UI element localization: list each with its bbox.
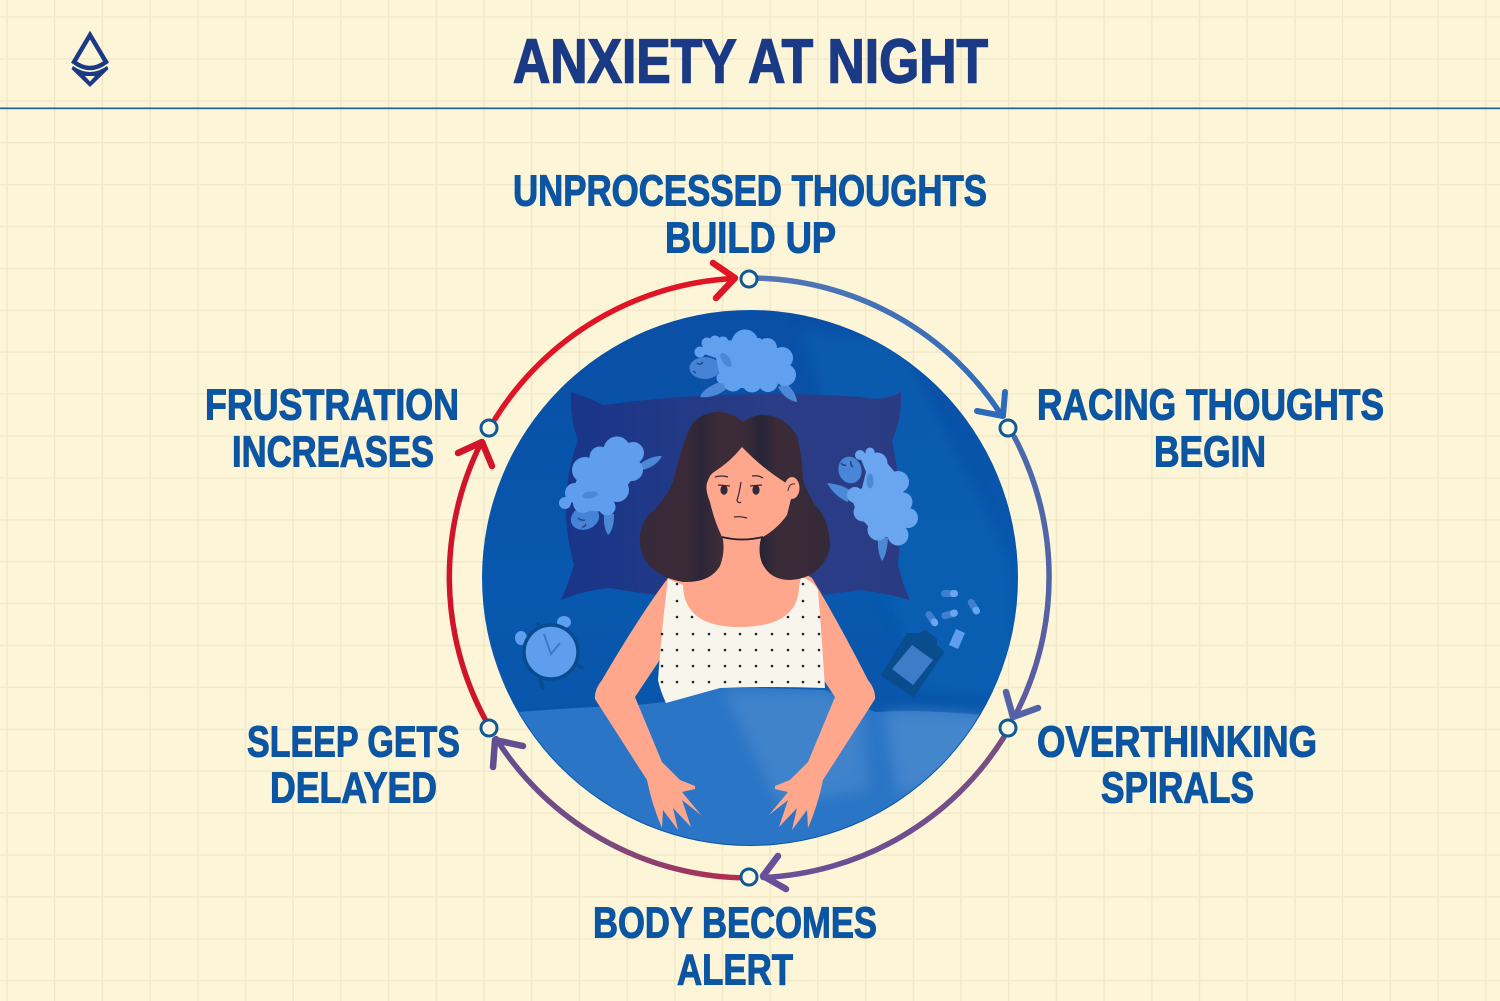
alarm clock xyxy=(515,616,582,688)
label: overthinking spirals: SPIRALS xyxy=(1101,764,1254,812)
sheep: left xyxy=(559,436,662,535)
arrow: sleep delayed to frustration xyxy=(449,442,492,719)
pillow xyxy=(561,392,910,600)
sheep: right xyxy=(827,448,918,561)
blanket xyxy=(519,688,980,845)
label: frustration increases: INCREASES xyxy=(232,428,434,476)
label: racing thoughts begin: BEGIN xyxy=(1154,428,1266,476)
necklace xyxy=(722,537,763,540)
label: unprocessed thoughts build up xyxy=(513,166,987,262)
label: sleep gets delayed: SLEEP GETS xyxy=(247,718,460,766)
polka dot tank top xyxy=(658,577,825,703)
label: unprocessed thoughts build up: UNPROCESSED THOUGHTS xyxy=(513,166,987,216)
face xyxy=(706,447,792,540)
soft light band xyxy=(812,339,953,477)
label: overthinking spirals: OVERTHINKING xyxy=(1037,718,1317,766)
ear xyxy=(784,477,800,499)
title: ANXIETY AT NIGHT xyxy=(513,28,988,96)
label: body becomes alert xyxy=(593,898,877,994)
arrow: body alert to sleep delayed xyxy=(493,738,739,878)
arrow: racing thoughts to overthinking xyxy=(1006,437,1049,717)
eyes, brows, nose and mouth xyxy=(715,476,763,518)
arrow: frustration to thoughts build up xyxy=(495,263,735,419)
pill bottle and pills xyxy=(883,590,981,695)
label: racing thoughts begin: RACING THOUGHTS xyxy=(1037,380,1384,430)
label: racing thoughts begin xyxy=(1037,380,1384,476)
blanket highlights xyxy=(724,692,868,805)
logo icon xyxy=(72,35,108,87)
label: sleep gets delayed: DELAYED xyxy=(270,764,437,812)
illustration: woman awake in bed xyxy=(470,310,1030,860)
hair xyxy=(640,412,830,582)
sheep: top xyxy=(690,330,797,402)
header divider line xyxy=(0,108,1500,109)
label: frustration increases: FRUSTRATION xyxy=(205,380,459,430)
label: body becomes alert: ALERT xyxy=(677,946,793,994)
label: overthinking spirals xyxy=(1037,718,1317,812)
label: body becomes alert: BODY BECOMES xyxy=(593,898,877,948)
arrow: thoughts build up to racing thoughts xyxy=(757,278,1005,416)
cycle ring xyxy=(449,263,1049,889)
ring nodes xyxy=(481,271,1016,885)
background disc xyxy=(482,310,1018,846)
woman xyxy=(595,412,875,830)
arrow: overthinking to body alert xyxy=(763,737,1004,889)
arms and chest xyxy=(595,537,875,830)
label: sleep gets delayed xyxy=(247,718,460,812)
label: unprocessed thoughts build up: BUILD UP xyxy=(665,214,836,262)
label: frustration increases xyxy=(205,380,459,476)
scene clipped to disc xyxy=(519,339,982,845)
